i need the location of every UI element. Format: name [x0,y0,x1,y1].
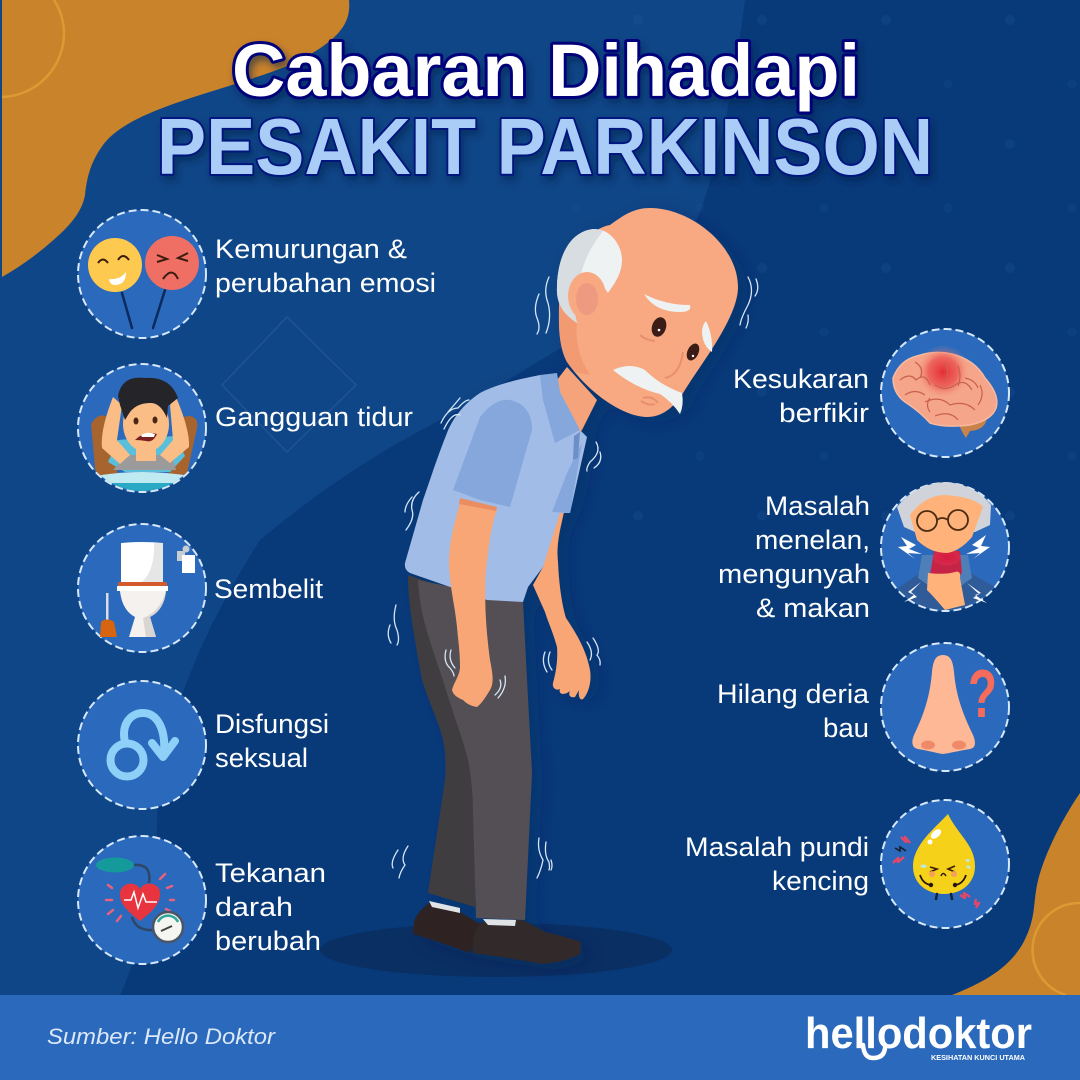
socks [429,901,516,926]
label line 2: darah [215,892,293,922]
icon: old man holding throat [881,482,1009,620]
decorative orange blob bottom-right [952,793,1080,995]
far sleeve [552,443,582,513]
far arm [533,512,591,699]
label [733,364,869,428]
ground shadow [320,923,672,977]
label line 1: Kesukaran [733,364,869,394]
panel: Kemurungan [78,210,436,338]
panel: Tekanan darah berubah [78,836,326,964]
icon: sleepless man in bed [78,364,206,496]
label line 1: Kemurungan & [215,234,407,264]
icon: heart and blood pressure gauge [78,836,206,964]
eyes [649,315,702,362]
nose and mouth [640,335,683,405]
back shoe [413,903,482,953]
icon: happy and angry balloons [78,210,206,338]
trousers back leg [408,575,480,907]
icon: toilet [78,524,206,652]
label [685,832,869,896]
icon: male symbol drooping arrow [78,681,206,809]
label line 1: Hilang deria [717,679,870,709]
panel: Masalah pundi kencing [685,800,1009,928]
head [559,208,738,417]
decorative orange blob top-left [2,0,349,277]
label line 2: berfikir [779,398,869,428]
label line 2: bau [823,713,869,743]
label line 1: Masalah pundi [685,832,869,862]
label [717,679,870,743]
label: Sembelit [214,574,324,604]
trousers front leg [418,580,532,920]
back of head shade [559,300,590,375]
panel: Disfungsi seksual [78,681,329,809]
panel: Gangguan tidur [78,364,413,496]
illustration: elderly man with tremor [388,208,758,964]
title line 2: PESAKIT PARKINSON [157,102,933,191]
neck [557,367,597,432]
label line 2: perubahan emosi [215,268,436,298]
near arm [449,502,497,707]
logo: hellodoktor: hellodoktor [805,1009,1032,1058]
label [718,491,870,623]
source note: Sumber: Hello Doktor [47,1024,277,1049]
tremor lines [388,277,758,878]
label line 1: Disfungsi [215,709,329,739]
label: Gangguan tidur [215,402,413,432]
label [215,709,329,773]
label [215,858,326,956]
label line 4: & makan [756,593,870,623]
panel: Masalah menelan [718,482,1009,623]
panel: Sembelit [78,524,324,652]
collar [540,373,580,443]
icon: brain [881,329,1009,457]
icon: nose and question mark: ? [968,656,997,732]
near sleeve shade [453,400,532,507]
front shoe [473,920,581,964]
icon: nose and question mark [881,643,1009,771]
label line 2: kencing [772,866,869,896]
label line 2: menelan, [755,525,870,555]
footer bar [0,995,1080,1080]
icon: crying urine drop [881,800,1009,928]
logo tagline: KESIHATAN KUNCI UTAMA [931,1055,1025,1062]
eyebrows [644,294,712,352]
label [215,234,436,298]
panel: Kesukaran berfikir [733,329,1009,457]
moustache [613,366,683,414]
label line 3: mengunyah [718,559,870,589]
label line 2: seksual [215,743,308,773]
title line 1: Cabaran Dihadapi [232,29,860,112]
shirt [405,375,587,602]
ear [568,272,606,320]
label line 1: Tekanan [215,858,326,888]
hair [557,229,622,323]
label line 1: Masalah [765,491,870,521]
panel: Hilang deria bau [717,643,1009,771]
label line 3: berubah [215,926,321,956]
title [157,29,933,191]
